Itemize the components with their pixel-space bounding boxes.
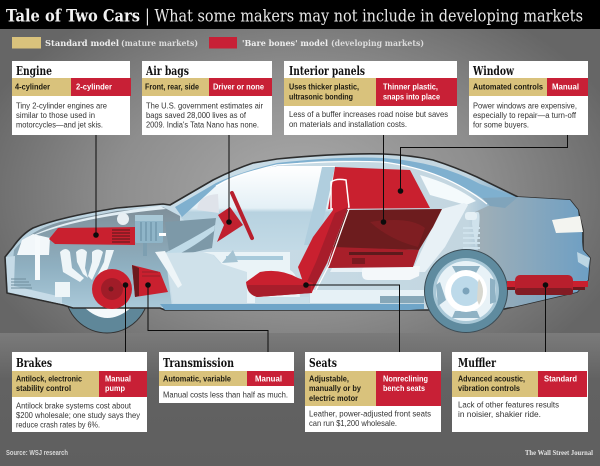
panel: brakes: reduce crash rates by 6%. [16, 420, 100, 430]
panel: brakes: Brakes [16, 356, 52, 370]
floor panel [165, 252, 247, 303]
panel: engine: Engine [16, 64, 52, 78]
panel: window: especially to repair—a turn-off [473, 110, 577, 120]
panel: interior panels: ultrasonic bonding [289, 91, 353, 101]
panel: interior panels: snaps into place [383, 91, 440, 101]
steering column [155, 251, 182, 288]
panel: seats: bench seats [383, 383, 425, 393]
panel: interior panels: on materials and installation costs. [289, 119, 407, 129]
rear window [420, 175, 476, 205]
transmission housing [132, 265, 168, 297]
panel: air bags: 2009. India's Tata Nano has none. [146, 120, 259, 130]
muffler [507, 275, 588, 295]
icon: front wheel [65, 249, 149, 333]
leader line: engine [93, 135, 99, 238]
icon: engine manifold [55, 249, 114, 297]
brake disc [92, 269, 132, 309]
panel: brakes: stability control [16, 383, 71, 393]
dashboard [165, 218, 216, 258]
panel: interior panels [284, 61, 457, 135]
panel: brakes: pump [105, 383, 125, 393]
panel: muffler: Standard [544, 374, 577, 384]
panel: air bags: The U.S. government estimates air [146, 100, 263, 110]
header bar [0, 0, 600, 29]
panel: seats: manually or by [309, 383, 361, 393]
panel: seats [305, 352, 441, 432]
panel: engine: Tiny 2-cylinder engines are [16, 100, 107, 110]
rear quarter [470, 197, 590, 309]
door window area [328, 167, 430, 209]
title: Tale of Two Cars [6, 7, 140, 27]
legend [12, 37, 424, 49]
icon: mirror [197, 194, 219, 213]
panel: transmission: Manual [255, 374, 282, 384]
panel: window [469, 61, 588, 135]
panel: muffler: vibration controls [458, 383, 520, 393]
panel: air bags: bags saved 28,000 lives as of [146, 110, 247, 120]
roof band [175, 158, 518, 217]
panel: seats: Seats [309, 356, 337, 370]
leader line: air bags [226, 135, 232, 225]
panel: brakes: Antilock brake systems cost about [16, 400, 132, 410]
panel: transmission: Transmission [163, 356, 234, 370]
cabin glass [180, 166, 335, 250]
panel: seats: Adjustable, [309, 374, 349, 384]
icon: headlight [17, 234, 50, 280]
panel: window: Power windows are expensive, [473, 100, 577, 110]
engine bay [10, 207, 180, 307]
panel: seats: Nonreclining [383, 374, 428, 384]
panel: engine: 2-cylinder [76, 82, 113, 92]
panel: seats: can run $1,200 wholesale. [309, 418, 397, 428]
door interior [333, 209, 442, 250]
legend: (developing markets) [331, 38, 424, 49]
panel: seats: Leather, power-adjusted front seats [309, 408, 431, 418]
icon: tail light [552, 216, 583, 233]
panel: window: Manual [552, 82, 579, 92]
panel: interior panels: Thinner plastic, [383, 82, 438, 92]
engine cover [49, 227, 135, 245]
hood highlight [24, 206, 166, 240]
legend: 'Bare bones' model [242, 39, 329, 49]
leader line: interior panels [381, 135, 386, 225]
leader line: transmission [145, 282, 268, 352]
panel: engine: 4-cylinder [15, 82, 51, 92]
panel: transmission: Automatic, variable [163, 374, 231, 384]
panel: brakes [12, 352, 147, 432]
panel: brakes: Manual [105, 374, 131, 384]
panel: brakes: $200 wholesale; one study says they [16, 410, 141, 420]
leader line: muffler [543, 282, 548, 352]
panel: interior panels: Interior panels [289, 64, 365, 78]
door panel [327, 167, 442, 268]
panel: window: Window [472, 64, 515, 78]
icon: air filter [117, 213, 166, 256]
legend: (mature markets) [121, 38, 198, 49]
source note: Source: WSJ research [6, 450, 68, 457]
panel: interior panels: Less of a buffer increases road noise but saves [289, 109, 448, 119]
panel: air bags [142, 61, 272, 135]
front seat [246, 179, 349, 297]
panel: muffler [452, 352, 588, 432]
panel: transmission: Manual costs less than half as much. [163, 390, 288, 400]
legend: Standard model [45, 39, 120, 49]
panel: engine: motorcycles—and jet skis. [16, 120, 103, 130]
leader line: seats [303, 282, 400, 352]
icon: rear wheel [424, 250, 508, 332]
door lower panel [327, 247, 419, 268]
leader line: brakes [123, 282, 128, 352]
panel: window: for some buyers. [473, 120, 529, 130]
car body [5, 154, 590, 310]
panel: window: Automated controls [473, 82, 543, 92]
credit: The Wall Street Journal [525, 448, 593, 457]
panel: engine [12, 61, 131, 135]
panel: air bags: Front, rear, side [145, 82, 199, 92]
steering wheel [217, 193, 252, 242]
panel: air bags: Air bags [145, 64, 189, 78]
panel: brakes: Antilock, electronic [16, 374, 82, 384]
panel: interior panels: Uses thicker plastic, [289, 82, 359, 92]
icon: front bumper and grille [6, 256, 62, 304]
car illustration [5, 154, 590, 333]
panel: air bags: Driver or none [213, 82, 264, 92]
a-pillar [304, 167, 335, 245]
icon: rear bumper highlight [577, 252, 590, 268]
panel: engine: similar to those used in [16, 110, 95, 120]
panel: muffler: Muffler [458, 356, 497, 370]
panel: muffler: in noisier, shakier ride. [458, 409, 541, 419]
rear seat [362, 266, 420, 280]
panel: transmission [159, 352, 294, 403]
panel: muffler: Advanced acoustic, [458, 374, 525, 384]
panel: muffler: Lack of other features results [458, 400, 559, 410]
rear seat pillar [330, 203, 468, 272]
leader line: window [398, 135, 568, 194]
panel: seats: electric motor [309, 393, 359, 403]
rocker panel [160, 304, 424, 310]
icon: rear spring [463, 212, 480, 248]
